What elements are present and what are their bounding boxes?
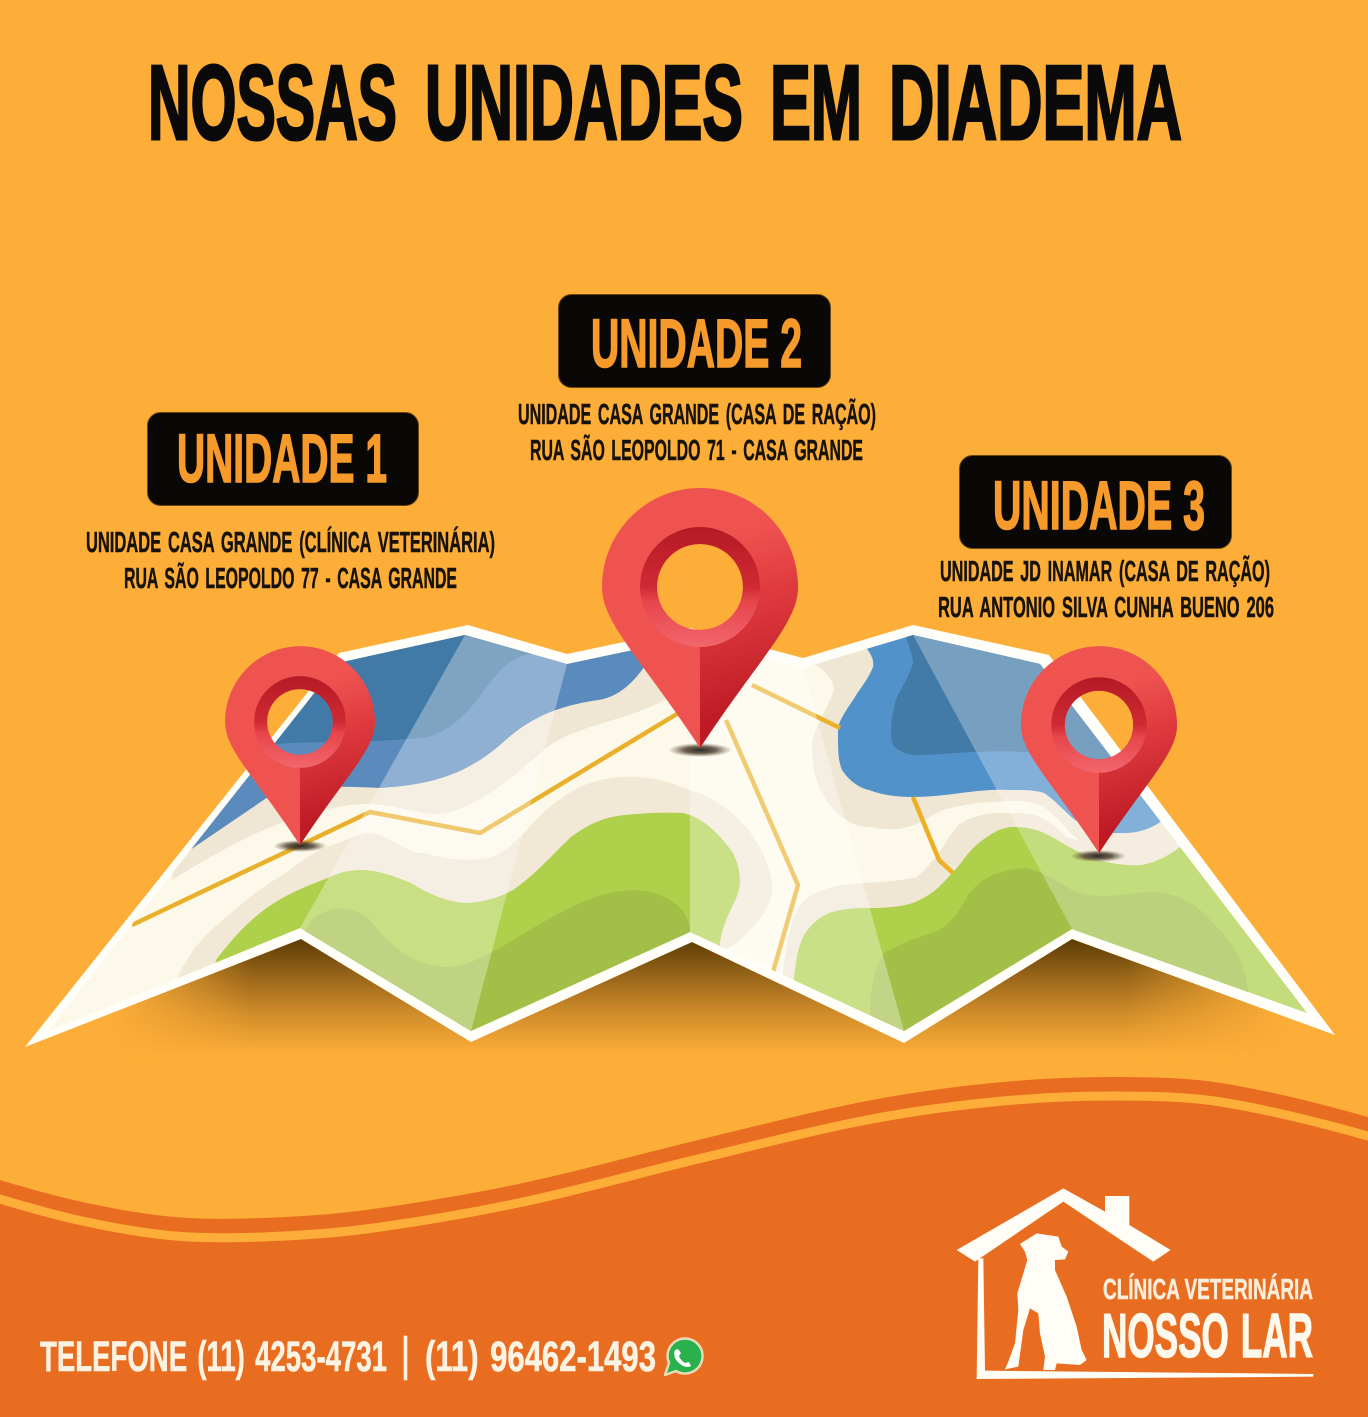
title xyxy=(148,44,1182,162)
pin shadow 3 xyxy=(1070,850,1126,862)
address: unidade 2: RUA SÃO LEOPOLDO 71 - CASA GRANDE xyxy=(530,433,863,467)
map paper border xyxy=(25,625,1335,1047)
title: NOSSAS xyxy=(148,44,397,162)
map features xyxy=(48,635,1307,1032)
telephone line: (11) 96462-1493 xyxy=(425,1333,656,1381)
folded map illustration xyxy=(25,625,1335,1048)
logo house and dog xyxy=(957,1188,1313,1379)
fold highlights xyxy=(300,635,567,1031)
map ground shadow xyxy=(131,939,1264,1048)
telephone line: TELEFONE (11) 4253-4731 xyxy=(40,1333,387,1381)
title: EM xyxy=(770,44,862,162)
green land right xyxy=(794,827,1320,1040)
footer wave band xyxy=(0,1077,1368,1417)
pin shadow 1 xyxy=(273,840,327,852)
roads xyxy=(132,700,700,925)
address: unidade 1: UNIDADE CASA GRANDE (CLÍNICA VETERINÁRIA) xyxy=(86,525,495,559)
logo: clinica veterinaria nosso lar xyxy=(957,1188,1313,1379)
icon: whatsapp xyxy=(665,1339,703,1375)
blue water right xyxy=(838,635,1161,834)
address: unidade 1: RUA SÃO LEOPOLDO 77 - CASA GRANDE xyxy=(124,561,457,595)
green land left xyxy=(200,813,740,1040)
badge: unidade 1 xyxy=(148,412,418,506)
badge: unidade 2 xyxy=(558,294,830,388)
badge: unidade 2: UNIDADE 2 xyxy=(591,305,802,382)
map pin 2 xyxy=(602,488,798,748)
badge: unidade 3 xyxy=(960,456,1232,548)
blue water left xyxy=(191,635,644,850)
address: unidade 2 xyxy=(518,397,876,467)
title: UNIDADES xyxy=(425,44,743,162)
map pin 1 xyxy=(225,646,375,845)
pin shadow 2 xyxy=(668,743,732,757)
badge: unidade 1: UNIDADE 1 xyxy=(177,420,387,497)
badge: unidade 3: UNIDADE 3 xyxy=(993,467,1205,544)
address: unidade 3 xyxy=(938,554,1274,624)
address: unidade 2: UNIDADE CASA GRANDE (CASA DE RAÇÃO) xyxy=(518,397,876,431)
map pin 3 xyxy=(1021,646,1177,853)
address: unidade 1 xyxy=(86,525,495,595)
